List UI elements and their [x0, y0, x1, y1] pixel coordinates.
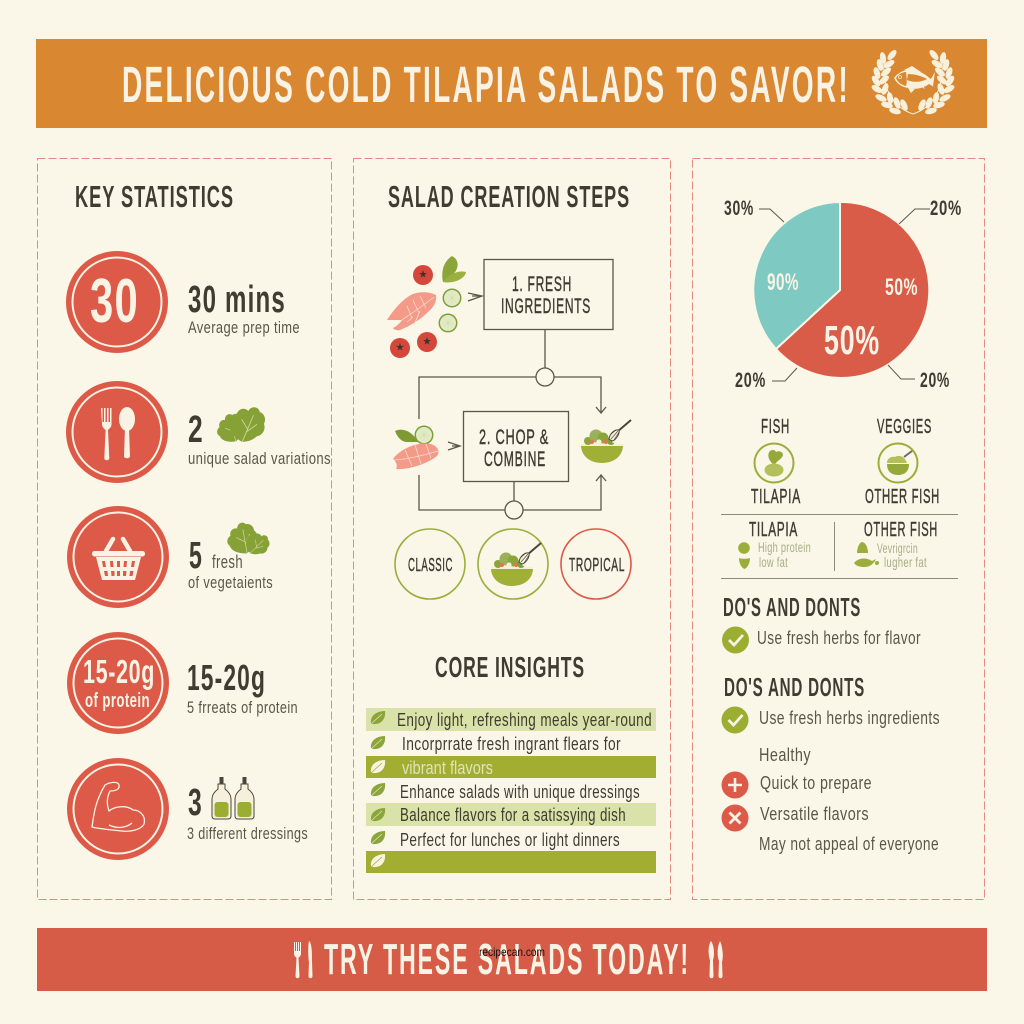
comparison table: Vevrigrcin	[877, 540, 918, 556]
core insights list: Perfect for lunches or light dinners	[400, 830, 620, 850]
step 2 box: COMBINE	[484, 448, 546, 471]
heading: key statistics: KEY STATISTICS	[75, 179, 234, 214]
icon: lettuce leaves	[213, 401, 270, 447]
stat: 3 dressings	[67, 758, 308, 860]
step 1 box: 1. FRESH	[512, 273, 572, 296]
stat: 5 fresh vegetables: fresh	[212, 552, 243, 572]
do's and don'ts second: Use fresh herbs ingredients	[759, 708, 940, 728]
stat: 5 fresh vegetables	[67, 506, 274, 608]
step 2 box: 2. CHOP &	[479, 426, 549, 449]
icon: fish herb badge	[754, 444, 794, 482]
do's and don'ts second: Healthy	[759, 745, 811, 765]
comparison table: low fat	[759, 554, 788, 570]
do's and don'ts second: Quick to prepare	[760, 773, 872, 793]
icon: spoon and knife right	[709, 941, 723, 978]
icon: fork and spoon	[101, 407, 135, 460]
flowchart connectors	[419, 293, 606, 519]
pie chart: 20%	[920, 369, 950, 392]
stat: 2 salad variations: 2	[188, 409, 204, 451]
comparison: fish vs veggies: TILAPIA	[751, 486, 801, 508]
icon: dressing bottles	[212, 777, 254, 819]
icon: basket	[92, 539, 145, 580]
variation: classic: CLASSIC	[408, 555, 453, 575]
icon: chopped salmon	[393, 426, 439, 469]
panel: key statistics	[38, 158, 332, 900]
do's and don'ts second	[722, 672, 940, 854]
stat: 30 mins: 30 mins	[188, 279, 286, 321]
step 1 box	[484, 260, 613, 330]
icon: fork and knife left	[294, 941, 312, 978]
variation: tropical: TROPICAL	[569, 555, 625, 575]
step 2 box	[464, 412, 568, 482]
core insights list: Incorprrate fresh ingrant flears for	[402, 734, 621, 754]
icon: lettuce sprig	[223, 520, 274, 560]
comparison: fish vs veggies	[751, 416, 940, 508]
pie chart: 90%	[767, 269, 799, 296]
panel: nutrition and comparison	[692, 158, 984, 900]
stat: 30 mins	[66, 251, 300, 353]
pie chart: 50%	[824, 317, 880, 363]
footer call to action: TRY THESE SALADS TODAY!	[324, 935, 690, 984]
comparison table: TILAPIA	[749, 519, 798, 541]
comparison: fish vs veggies: VEGGIES	[877, 416, 932, 438]
comparison: fish vs veggies: FISH	[761, 416, 790, 438]
comparison: fish vs veggies: OTHER FISH	[865, 486, 940, 508]
core insights list	[366, 708, 656, 873]
watermark: recipecan.com	[479, 945, 545, 959]
stat: 15-20g protein: 15-20g	[187, 657, 266, 698]
core insights list: vibrant flavors	[402, 758, 493, 778]
step 1 box: INGREDIENTS	[501, 295, 591, 318]
footer banner	[37, 928, 987, 991]
variation: tropical	[561, 529, 631, 599]
stat: 30 mins: 30	[90, 267, 139, 336]
icon: flexed arm	[92, 782, 144, 831]
pie chart	[724, 197, 962, 392]
comparison table: OTHER FISH	[864, 519, 938, 541]
title banner	[36, 39, 987, 128]
stat: 3 dressings: 3 different dressings	[187, 824, 308, 843]
core insights list: Enhance salads with unique dressings	[400, 782, 640, 802]
icon: veggie bowl badge	[878, 444, 918, 482]
icon: salad bowl with whisk	[581, 420, 631, 463]
do's and don'ts first: Use fresh herbs for flavor	[757, 628, 921, 648]
do's and don'ts first: DO'S AND DONTS	[723, 592, 861, 622]
do's and don'ts second: DO'S AND DONTS	[724, 672, 865, 702]
stat: 15-20g protein	[67, 632, 298, 734]
stat: 5 fresh vegetables: of vegetaients	[188, 573, 273, 592]
heading: salad creation steps: SALAD CREATION STEPS	[388, 179, 630, 214]
stat: 30 mins: Average prep time	[188, 318, 300, 337]
icon: fish in laurel wreath	[870, 48, 956, 115]
stat: 15-20g protein: 15-20g	[83, 653, 155, 690]
stat: 2 salad variations: unique salad variations	[188, 449, 331, 468]
stat: 3 dressings: 3	[188, 782, 203, 824]
variation: salad bowl	[478, 529, 548, 599]
heading: core insights: CORE INSIGHTS	[435, 652, 585, 684]
comparison table: High protein	[758, 539, 811, 555]
stat: 15-20g protein: 5 frreats of protein	[187, 698, 298, 717]
pie chart: 50%	[885, 274, 918, 301]
variation: classic	[395, 529, 465, 599]
comparison table: lugher fat	[884, 554, 927, 570]
icon: fresh ingredients	[387, 256, 466, 358]
comparison table	[721, 514, 958, 578]
core insights list: Enjoy light, refreshing meals year-round	[397, 710, 652, 730]
pie chart: 20%	[735, 369, 766, 392]
do's and don'ts second: May not appeal of everyone	[759, 834, 939, 854]
stat: 5 fresh vegetables: 5	[189, 535, 203, 577]
stat: 2 salad variations	[66, 381, 331, 483]
core insights list: Balance flavors for a satissying dish	[400, 805, 626, 825]
do's and don'ts second: Versatile flavors	[760, 804, 869, 824]
pie chart: 20%	[930, 197, 962, 220]
do's and don'ts first	[722, 592, 921, 654]
stat: 15-20g protein: of protein	[85, 690, 150, 712]
pie chart: 30%	[724, 197, 754, 220]
panel: salad creation steps and core insights	[354, 158, 670, 900]
